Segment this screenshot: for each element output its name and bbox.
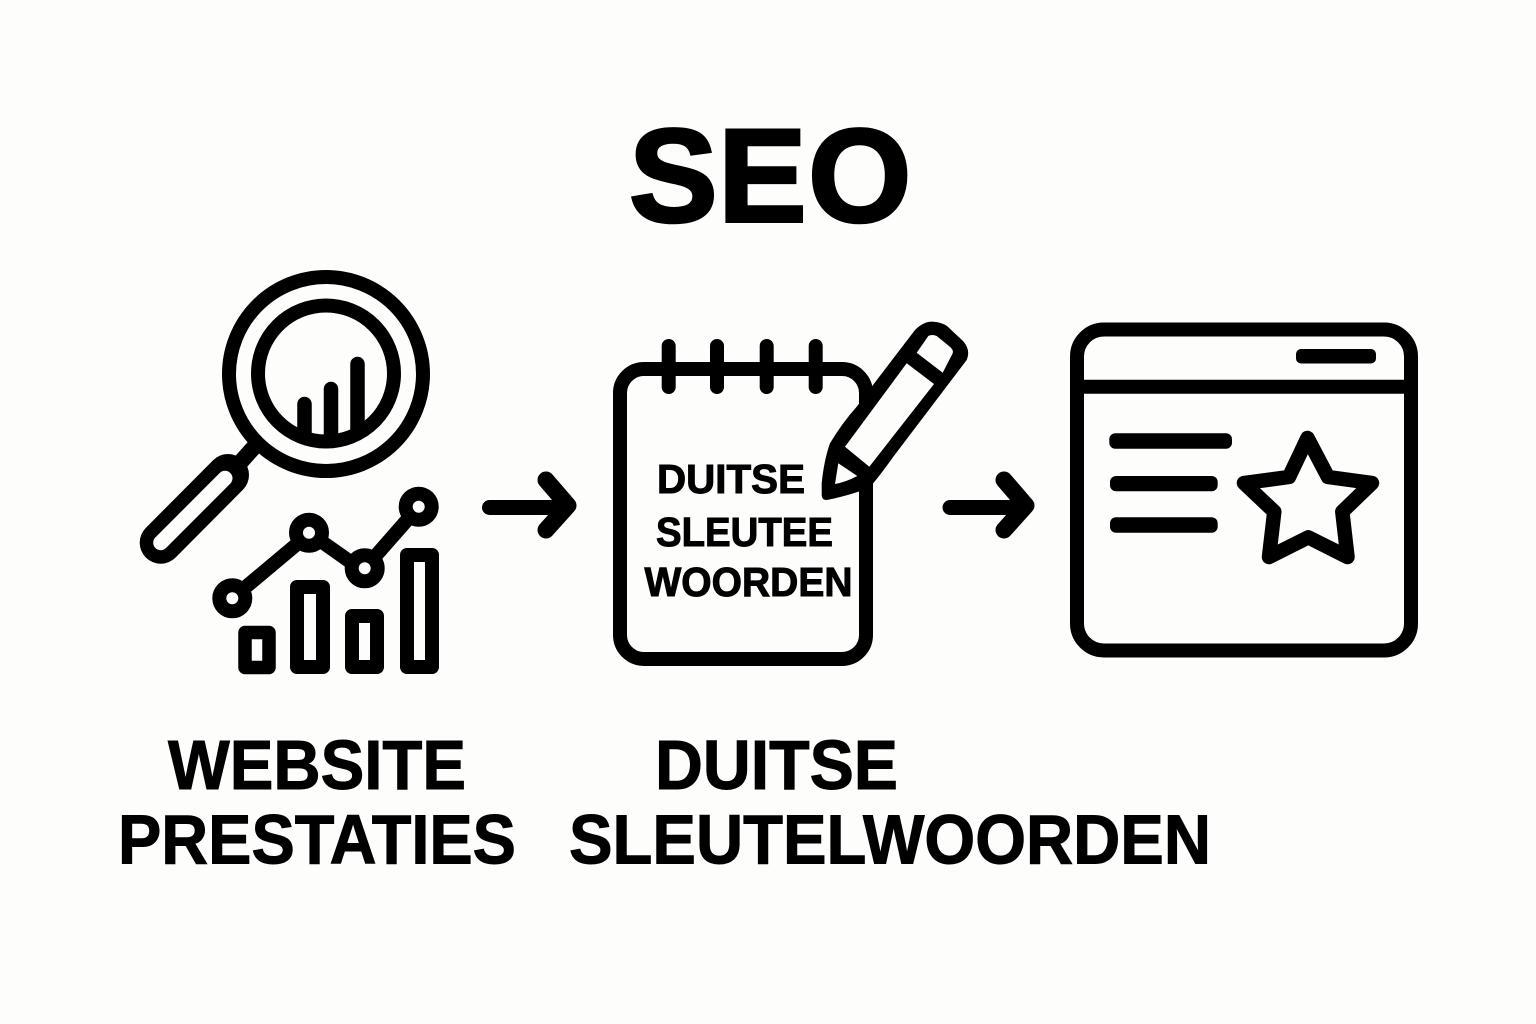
icon: pencil <box>822 322 968 500</box>
label: website prestaties <box>118 726 516 878</box>
notepad text: WOORDEN <box>644 559 852 605</box>
label: website prestaties: WEBSITE <box>168 726 466 804</box>
label: website prestaties: PRESTATIES <box>118 800 516 878</box>
label: duitse sleutelwoorden: DUITSE <box>655 726 898 804</box>
title: SEO <box>629 102 911 250</box>
icon: magnifying glass with chart <box>161 277 423 543</box>
label: duitse sleutelwoorden: SLEUTELWOORDEN <box>569 800 1211 878</box>
notepad text <box>644 456 852 605</box>
icon: line and bar chart <box>219 494 432 668</box>
notepad text: DUITSE <box>657 456 805 502</box>
arrow: second to third <box>950 480 1026 530</box>
arrow: first to second <box>490 480 568 530</box>
label: duitse sleutelwoorden <box>569 726 1211 878</box>
icon: notepad with keywords <box>620 346 866 659</box>
notepad text: SLEUTEE <box>656 509 833 555</box>
icon: browser window with star <box>1077 330 1411 650</box>
